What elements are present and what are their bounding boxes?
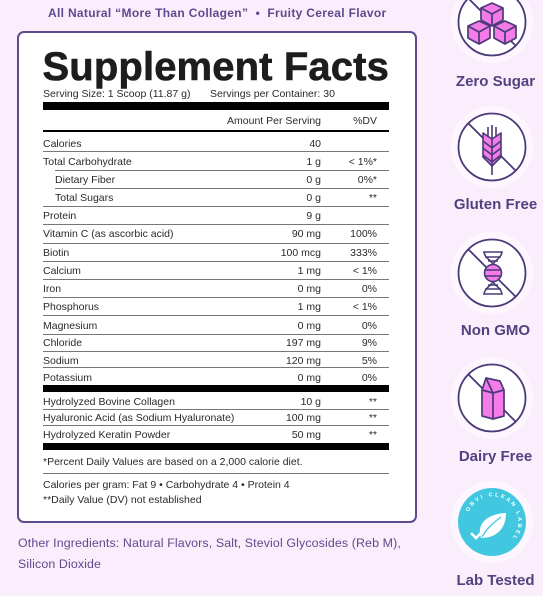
panel: supplement facts bbox=[17, 31, 417, 523]
row: chloride: 9% bbox=[362, 337, 377, 349]
row: magnesium: 0 mg bbox=[298, 320, 321, 332]
row: sodium bbox=[43, 355, 377, 367]
row: protein: 9 g bbox=[306, 210, 321, 222]
row: hyaluronic acid bbox=[43, 412, 377, 424]
row: dietary fiber: Dietary Fiber bbox=[55, 174, 115, 186]
footnote: dv not established: **Daily Value (DV) not established bbox=[43, 494, 202, 506]
row: calcium bbox=[43, 265, 377, 277]
title: Supplement Facts bbox=[42, 45, 389, 89]
row: biotin bbox=[43, 247, 377, 259]
label: zero sugar: Zero Sugar bbox=[456, 73, 535, 90]
servings per container: Servings per Container: 30 bbox=[210, 88, 335, 100]
row: calories bbox=[43, 138, 321, 150]
table header bbox=[227, 115, 377, 127]
row: keratin: 50 mg bbox=[292, 429, 321, 441]
table header: Amount Per Serving bbox=[227, 115, 321, 127]
row: total sugars: 0 g bbox=[306, 192, 321, 204]
row: chloride: Chloride bbox=[43, 337, 82, 349]
row: hydrolyzed bovine collagen: ** bbox=[369, 396, 377, 408]
calories per gram: Calories per gram: Fat 9 • Carbohydrate 4 • Protein 4 bbox=[43, 479, 290, 491]
row: vitamin c: 90 mg bbox=[292, 228, 321, 240]
row: hydrolyzed bovine collagen: 10 g bbox=[301, 396, 321, 408]
row: chloride: 197 mg bbox=[286, 337, 321, 349]
other ingredients: Other Ingredients: Natural Flavors, Salt, Steviol Glycosides (Reb M), Silicon Dioxide bbox=[18, 536, 401, 570]
footnote: daily values: *Percent Daily Values are based on a 2,000 calorie diet. bbox=[43, 456, 303, 468]
row: potassium: 0 mg bbox=[298, 372, 321, 384]
table header: %DV bbox=[353, 115, 377, 127]
icon: zero sugar bbox=[458, 0, 526, 56]
row: calcium: 1 mg bbox=[298, 265, 321, 277]
label: lab tested: Lab Tested bbox=[456, 572, 535, 588]
row: dietary fiber: 0%* bbox=[358, 174, 377, 186]
row: vitamin c bbox=[43, 228, 377, 240]
row: calcium: < 1% bbox=[353, 265, 377, 277]
row: calories: Calories bbox=[43, 138, 82, 150]
serving size: Serving Size: 1 Scoop (11.87 g) bbox=[43, 88, 190, 100]
row: phosphorus: Phosphorus bbox=[43, 301, 99, 313]
row: potassium bbox=[43, 372, 377, 384]
row: magnesium: Magnesium bbox=[43, 320, 97, 332]
row: hydrolyzed bovine collagen bbox=[43, 396, 377, 408]
label: dairy free: Dairy Free bbox=[459, 448, 532, 464]
row: iron: 0% bbox=[362, 283, 377, 295]
icon: non gmo bbox=[458, 238, 526, 308]
row: vitamin c: Vitamin C (as ascorbic acid) bbox=[43, 228, 174, 240]
row: total carbohydrate bbox=[43, 156, 377, 168]
icon: lab tested badge: OBVI CLEAN LABEL bbox=[466, 492, 522, 538]
row: magnesium: 0% bbox=[362, 320, 377, 332]
row: keratin bbox=[43, 429, 377, 441]
row: biotin: 333% bbox=[350, 247, 377, 259]
tagline: All Natural “More Than Collagen” • Fruity Cereal Flavor bbox=[48, 6, 387, 20]
row: phosphorus: 1 mg bbox=[298, 301, 321, 313]
row: keratin: ** bbox=[369, 429, 377, 441]
row: hyaluronic acid: ** bbox=[369, 412, 377, 424]
row: chloride bbox=[43, 337, 377, 349]
row: iron bbox=[43, 283, 377, 295]
icon: gluten free bbox=[458, 112, 526, 182]
label: gluten free: Gluten Free bbox=[454, 196, 537, 212]
row: total carbohydrate: 1 g bbox=[306, 156, 321, 168]
row: protein: Protein bbox=[43, 210, 76, 222]
row: potassium: Potassium bbox=[43, 372, 92, 384]
row: magnesium bbox=[43, 320, 377, 332]
row: biotin: Biotin bbox=[43, 247, 69, 259]
row: calories: 40 bbox=[309, 138, 321, 150]
row: total carbohydrate: Total Carbohydrate bbox=[43, 156, 132, 168]
row: hydrolyzed bovine collagen: Hydrolyzed Bovine Collagen bbox=[43, 396, 175, 408]
row: calcium: Calcium bbox=[43, 265, 81, 277]
icon: dairy free bbox=[458, 364, 526, 432]
row: keratin: Hydrolyzed Keratin Powder bbox=[43, 429, 170, 441]
row: iron: 0 mg bbox=[298, 283, 321, 295]
row: dietary fiber bbox=[55, 174, 377, 186]
row: potassium: 0% bbox=[362, 372, 377, 384]
row: dietary fiber: 0 g bbox=[306, 174, 321, 186]
row: phosphorus bbox=[43, 301, 377, 313]
row: sodium: Sodium bbox=[43, 355, 79, 367]
label: non gmo: Non GMO bbox=[461, 322, 530, 338]
row: phosphorus: < 1% bbox=[353, 301, 377, 313]
row: total carbohydrate: < 1%* bbox=[349, 156, 377, 168]
row: total sugars: ** bbox=[369, 192, 377, 204]
row: total sugars bbox=[55, 192, 377, 204]
row: total sugars: Total Sugars bbox=[55, 192, 113, 204]
row: iron: Iron bbox=[43, 283, 61, 295]
row: sodium: 120 mg bbox=[286, 355, 321, 367]
row: hyaluronic acid: Hyaluronic Acid (as Sodium Hyaluronate) bbox=[43, 412, 234, 424]
row: hyaluronic acid: 100 mg bbox=[286, 412, 321, 424]
row: vitamin c: 100% bbox=[350, 228, 377, 240]
row: sodium: 5% bbox=[362, 355, 377, 367]
row: biotin: 100 mcg bbox=[281, 247, 321, 259]
icon: lab tested badge bbox=[458, 488, 526, 556]
row: protein bbox=[43, 210, 321, 222]
